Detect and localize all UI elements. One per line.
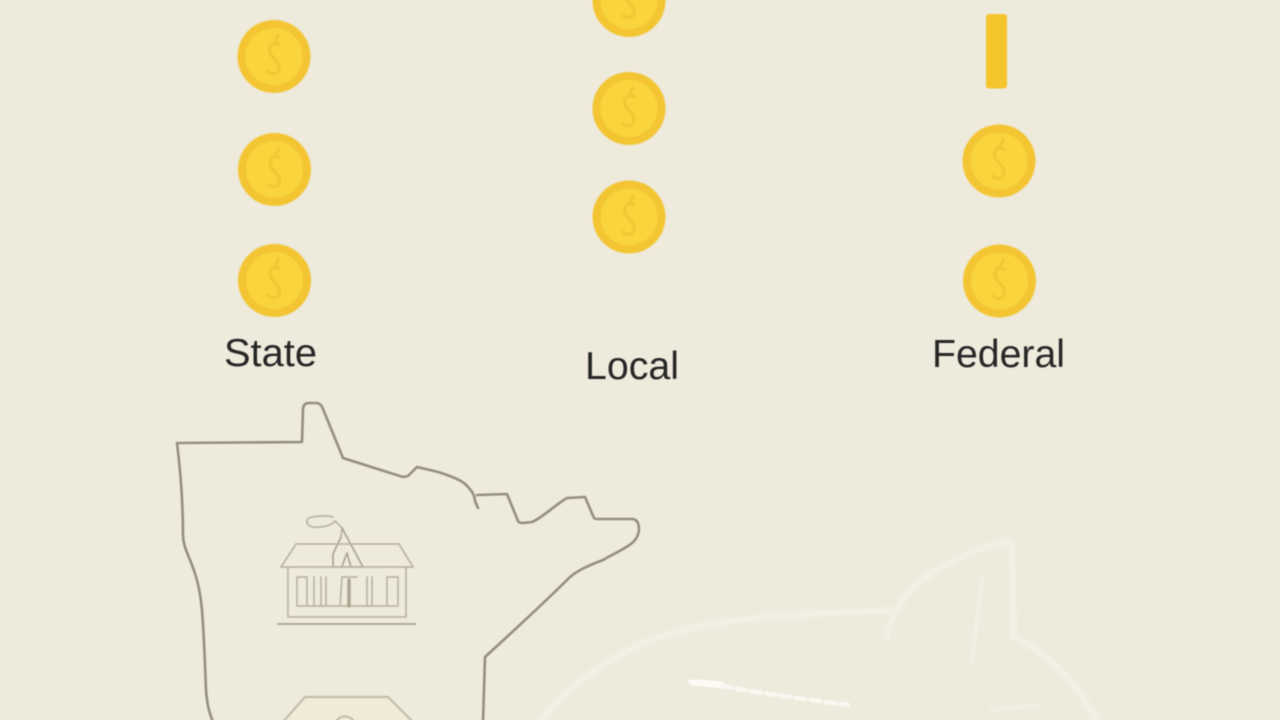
column: State coins	[238, 20, 311, 317]
column: Federal coins	[962, 14, 1036, 318]
icon: coin seen edge-on	[986, 14, 1007, 88]
roof	[281, 544, 413, 567]
icon: state coin 2	[238, 133, 311, 206]
icon: federal coin 1	[962, 124, 1036, 198]
icon: state coin 3	[238, 244, 311, 317]
icon: federal coin 2	[963, 244, 1036, 318]
windows	[297, 577, 398, 606]
icon: schoolhouse with flag	[278, 516, 415, 624]
snout marks	[993, 692, 1054, 694]
steeple	[333, 528, 363, 567]
icon: local coin 1	[592, 0, 666, 37]
label: Federal: Federal	[932, 333, 1065, 376]
icon: price tag, clipped by the bottom edge	[283, 697, 413, 720]
ear	[886, 542, 1096, 719]
icon: local coin 3	[592, 180, 666, 254]
body	[541, 610, 893, 720]
map: Minnesota outline	[177, 403, 639, 720]
walls	[288, 568, 406, 617]
ground	[278, 623, 415, 625]
icon: piggy bank coin slot	[692, 682, 848, 705]
icon: state coin 1	[238, 20, 310, 93]
flag	[307, 516, 342, 538]
icon: local coin 2	[592, 72, 666, 145]
ear inner line	[972, 577, 982, 662]
icon: faint piggy bank	[541, 542, 1096, 720]
label: State: State	[224, 332, 317, 375]
column: Local coins	[592, 0, 666, 254]
label: Local: Local	[585, 345, 679, 388]
